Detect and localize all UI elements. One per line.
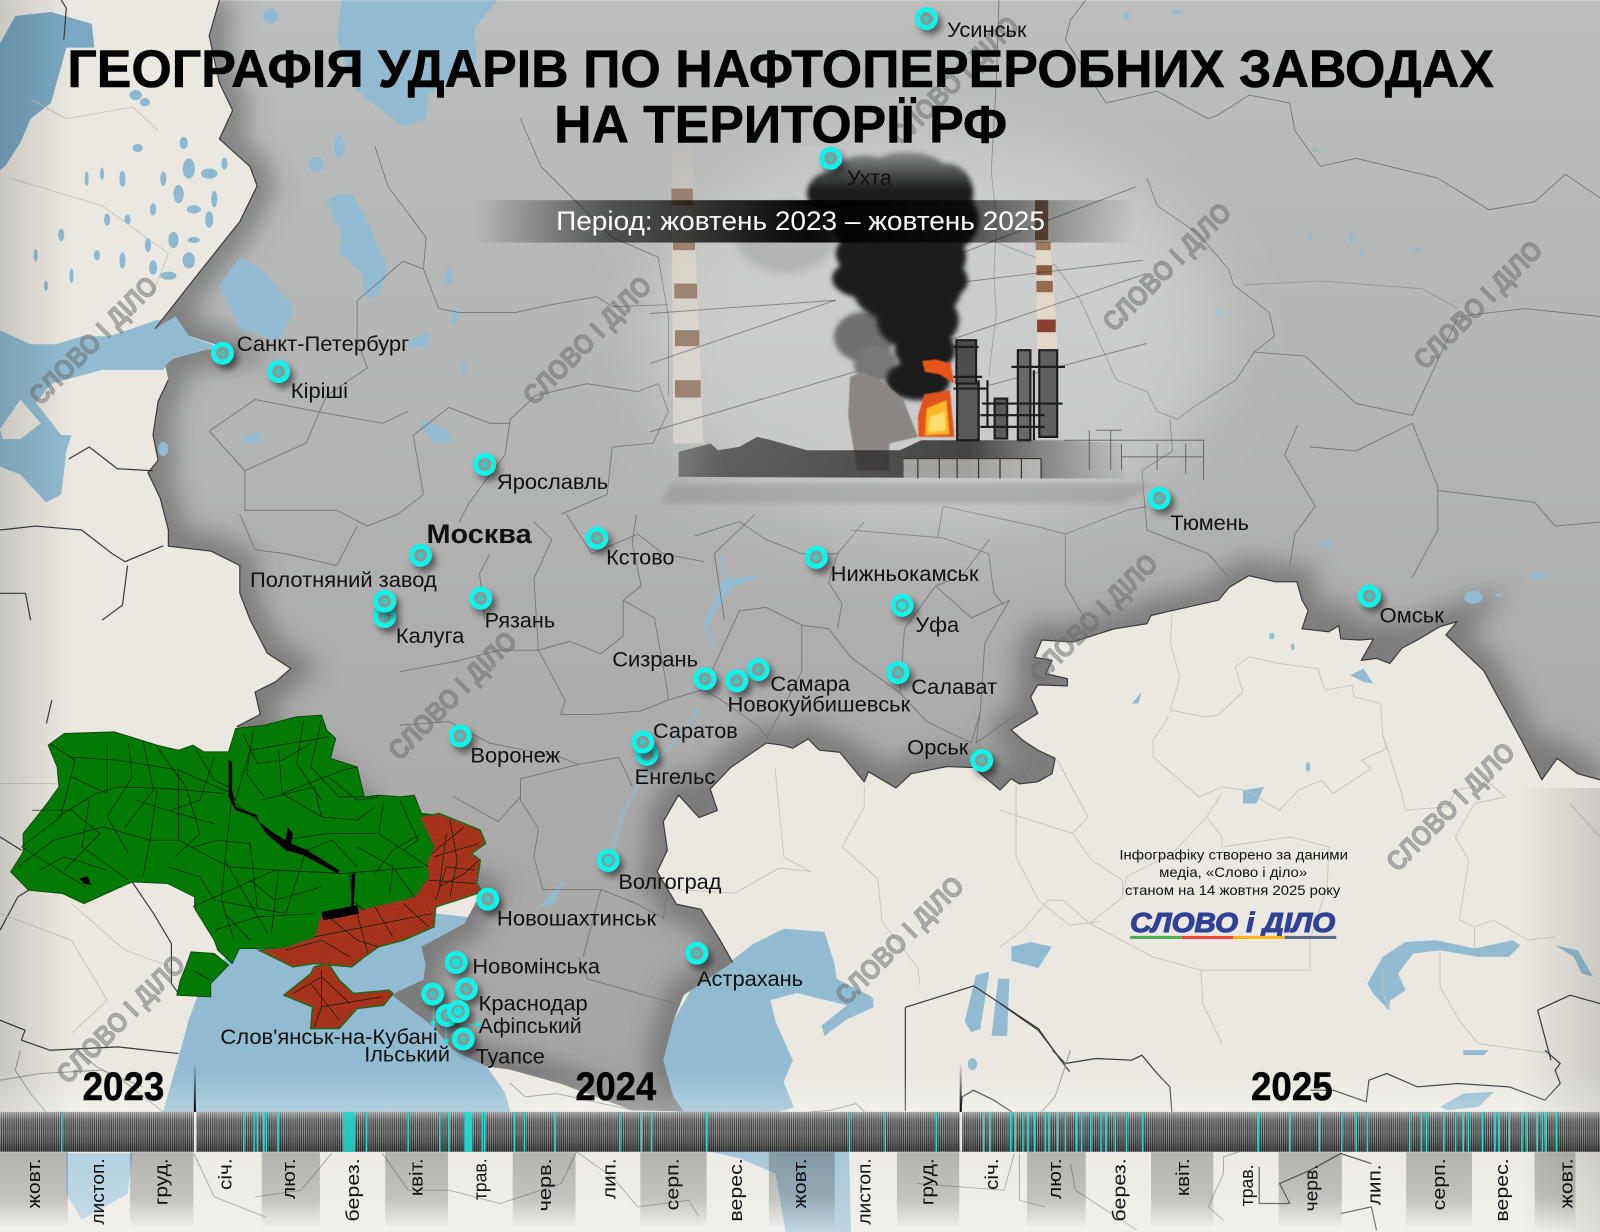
Енгельс	[635, 743, 716, 789]
month labels: жовт.	[23, 1158, 44, 1208]
Краснодар: Краснодар	[479, 991, 588, 1015]
attribution note: Інфографіку створено за даними	[1119, 847, 1348, 862]
Туапсе: Туапсе	[476, 1044, 545, 1068]
month labels: квіт.	[1172, 1158, 1193, 1196]
year labels	[83, 1065, 1333, 1109]
watermarks: СЛОВО І ДІЛО	[23, 270, 164, 411]
Ярославль	[473, 453, 608, 494]
Odesa region part	[177, 952, 229, 997]
Тюмень	[1148, 487, 1249, 535]
Слов'янськ-на-Кубані: Слов'янськ-на-Кубані	[220, 1025, 438, 1049]
Sea of Marmara	[66, 1153, 133, 1220]
month labels: жовт.	[1555, 1158, 1576, 1208]
month labels: трав.	[470, 1158, 491, 1200]
Волгоград	[597, 849, 722, 894]
Афіпський	[447, 1000, 582, 1038]
month labels: січ.	[981, 1158, 1002, 1190]
Kazakh lakes near the Caspian	[824, 943, 1052, 1036]
Афіпський: Афіпський	[479, 1014, 582, 1038]
Crimea	[284, 964, 393, 1029]
Астрахань: Астрахань	[697, 967, 803, 991]
icon: refinery columns	[954, 340, 1065, 440]
Полотняний завод	[250, 568, 437, 613]
watermarks: СЛОВО І ДІЛО	[50, 948, 191, 1089]
month labels: лип.	[1364, 1164, 1385, 1205]
month labels: серп.	[662, 1158, 683, 1210]
title: НА ТЕРИТОРІЇ РФ	[554, 96, 1007, 155]
Kazakhstan and Central Asia boundaries	[0, 614, 1600, 1230]
Енгельс: Енгельс	[635, 765, 716, 789]
Нижньокамськ	[805, 546, 979, 586]
watermarks: СЛОВО І ДІЛО	[829, 870, 970, 1011]
road network	[18, 720, 479, 1027]
logo: Слово і діло: СЛОВО і ДІЛО	[1130, 907, 1335, 938]
Кстово: Кстово	[606, 545, 674, 569]
watermarks: СЛОВО І ДІЛО	[1407, 234, 1548, 375]
Самара: Самара	[770, 672, 850, 696]
Санкт-Петербург	[211, 332, 409, 365]
month labels: берез.	[342, 1158, 363, 1222]
Ярославль: Ярославль	[497, 470, 608, 494]
Волгоград: Волгоград	[618, 870, 722, 894]
map of Ukraine	[11, 715, 486, 1029]
Новомінська: Новомінська	[472, 955, 600, 979]
Кіріші: Кіріші	[291, 379, 348, 403]
Москва	[409, 519, 532, 567]
month labels: верес.	[1491, 1158, 1512, 1222]
icon: grey smoke	[834, 312, 896, 382]
European borders	[0, 0, 179, 1054]
bottom fade overlays	[0, 1072, 1600, 1232]
year separators	[194, 1061, 962, 1152]
month labels: листоп.	[87, 1158, 108, 1225]
timeline	[0, 1061, 1600, 1232]
icon: left chimney	[671, 140, 704, 444]
smoke top fade	[800, 147, 986, 190]
Caspian Sea	[653, 929, 872, 1133]
Russia border outline	[148, 0, 1600, 962]
Уфа: Уфа	[915, 613, 959, 637]
Воронеж	[449, 724, 561, 767]
month labels: трав.	[1236, 1164, 1257, 1206]
free territory	[11, 715, 439, 964]
month labels: черв.	[534, 1158, 555, 1211]
Кстово	[586, 527, 674, 569]
Рязань	[469, 587, 555, 633]
subtitle bar	[474, 200, 1137, 243]
Калуга: Калуга	[396, 624, 464, 648]
month labels: листоп.	[853, 1158, 874, 1225]
month labels: груд.	[150, 1158, 171, 1205]
month labels: січ.	[215, 1158, 236, 1190]
occupied territory	[259, 814, 486, 967]
photo background haze	[648, 143, 1219, 531]
lakes in Russia	[140, 0, 1545, 907]
Baltic and Gulf of Bothnia	[0, 12, 222, 502]
southern Central Asia borders	[810, 1050, 1560, 1230]
watermarks: СЛОВО І ДІЛО	[1023, 547, 1164, 688]
Омськ	[1358, 585, 1445, 628]
month labels	[23, 1158, 1576, 1225]
Краснодар	[455, 978, 588, 1015]
Finnish lakes	[34, 90, 228, 291]
year labels: 2024	[576, 1065, 656, 1109]
icon: fire	[918, 360, 954, 437]
Саратов	[631, 719, 738, 753]
Калуга	[373, 605, 464, 648]
Тюмень: Тюмень	[1170, 511, 1249, 535]
Новошахтинськ	[476, 888, 657, 931]
southern Caspian	[709, 1151, 851, 1232]
month labels: лют.	[278, 1158, 299, 1199]
Ухта: Ухта	[847, 166, 892, 190]
Орськ: Орськ	[907, 735, 969, 759]
Ухта	[819, 147, 892, 190]
strike days 2023-2024	[62, 1112, 707, 1152]
Усинськ: Усинськ	[947, 18, 1027, 42]
strike days 2024-2025	[849, 1112, 1557, 1152]
Aral and eastern lakes	[1011, 571, 1593, 1010]
Орськ	[907, 735, 993, 772]
attribution note: станом на 14 жовтня 2025 року	[1125, 883, 1340, 898]
icon: refinery base	[679, 437, 1125, 479]
Central Asian lakes above the timeline	[968, 1050, 1494, 1110]
icon: black smoke plume	[807, 152, 979, 400]
Санкт-Петербург: Санкт-Петербург	[237, 332, 409, 356]
attribution note: медіа, «Слово і діло»	[1159, 865, 1308, 880]
month labels: лют.	[1044, 1158, 1065, 1199]
Кіріші	[267, 360, 348, 403]
month labels: серп.	[1428, 1158, 1449, 1210]
month labels: жовт.	[789, 1158, 810, 1208]
Нижньокамськ: Нижньокамськ	[831, 562, 979, 586]
watermarks: СЛОВО І ДІЛО	[382, 625, 523, 766]
month labels: квіт.	[405, 1158, 426, 1196]
Dnipro river and reservoirs	[79, 760, 359, 920]
year labels: 2025	[1251, 1065, 1333, 1109]
icon: burning tower	[848, 372, 918, 470]
month labels: берез.	[1109, 1158, 1130, 1222]
refinery photo with fog	[648, 140, 1219, 531]
icon: right chimney	[1035, 200, 1058, 357]
Воронеж: Воронеж	[470, 743, 561, 767]
Black Sea and Azov	[163, 898, 510, 1151]
Russian regional boundaries	[209, 0, 1600, 1004]
map markers and city labels	[211, 7, 1445, 1068]
Сизрань	[612, 648, 717, 690]
month labels: лип.	[598, 1158, 619, 1199]
Полотняний завод: Полотняний завод	[250, 568, 437, 592]
Caucasus and Turkey borders	[0, 1050, 699, 1217]
day stripes band	[0, 1112, 1600, 1152]
Новокуйбишевськ	[725, 669, 911, 716]
Астрахань	[686, 942, 803, 991]
Самара	[747, 658, 850, 696]
Салават: Салават	[911, 675, 997, 699]
watermarks: СЛОВО І ДІЛО	[517, 270, 658, 411]
Туапсе	[452, 1028, 545, 1068]
Слов'янськ-на-Кубані	[220, 983, 444, 1049]
month labels: черв.	[1300, 1164, 1321, 1211]
Москва: Москва	[427, 519, 532, 549]
attribution note	[1119, 847, 1348, 898]
title	[67, 40, 1494, 155]
Усинськ	[915, 7, 1027, 42]
Новомінська	[445, 951, 600, 979]
Уфа	[891, 594, 959, 637]
title: ГЕОГРАФІЯ УДАРІВ ПО НАФТОПЕРЕРОБНИХ ЗАВОДАХ	[67, 40, 1494, 99]
Новошахтинськ: Новошахтинськ	[497, 907, 657, 931]
Сизрань: Сизрань	[612, 648, 698, 672]
month labels: груд.	[917, 1158, 938, 1205]
month cells	[0, 1152, 1576, 1229]
Ільський: Ільський	[364, 1042, 450, 1066]
year labels: 2023	[83, 1065, 164, 1109]
Омськ: Омськ	[1380, 604, 1445, 628]
Рязань: Рязань	[485, 609, 555, 633]
Новокуйбишевськ: Новокуйбишевськ	[728, 692, 911, 716]
icon: power lines	[650, 187, 1146, 432]
Салават	[887, 661, 997, 699]
month labels: верес.	[725, 1158, 746, 1222]
arrows to Krasnodar-area labels	[431, 1003, 482, 1045]
Ільський	[364, 1004, 458, 1066]
subtitle text: Період: жовтень 2023 – жовтень 2025	[556, 206, 1045, 236]
Саратов: Саратов	[653, 719, 738, 743]
watermarks: СЛОВО І ДІЛО	[1096, 196, 1237, 337]
watermarks: СЛОВО І ДІЛО	[1380, 736, 1521, 877]
